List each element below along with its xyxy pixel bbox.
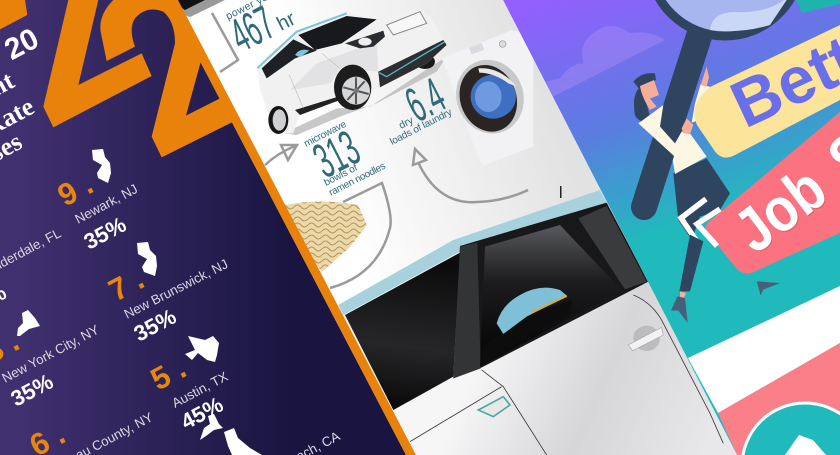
label: 313 bowls of ramen noodles: ramen noodles <box>327 161 388 199</box>
panel: job search infographic <box>500 0 840 455</box>
label: 467 hours: hr <box>273 8 299 35</box>
rank 7: New Brunswick: 7 . <box>103 261 150 308</box>
woman legs and shoes <box>671 235 780 323</box>
arrow: noodles connector <box>330 183 391 288</box>
pillar <box>453 243 481 378</box>
pink section with teal circle <box>718 343 840 455</box>
pink label: Job <box>705 112 840 274</box>
arrow: to microwave <box>265 145 297 165</box>
rank 9: Newark: Newark, NJ <box>72 181 140 227</box>
blouse and arm <box>638 105 688 158</box>
rank 5: Austin <box>145 336 230 434</box>
cloud <box>546 26 664 96</box>
rank 7: New Brunswick: New Brunswick, NJ <box>122 256 230 322</box>
silver car corner at top <box>178 0 225 17</box>
yellow label: Better <box>694 25 840 158</box>
panel: electric car infographic <box>170 0 753 455</box>
car door photo <box>338 190 737 455</box>
label: 313 bowls of ramen noodles <box>304 122 386 196</box>
hair <box>633 73 656 122</box>
pink label: Job: Job <box>723 155 840 267</box>
roof trim <box>338 190 607 315</box>
rear window <box>578 206 647 289</box>
face <box>640 80 659 110</box>
car illustration <box>257 9 447 135</box>
washing machine <box>442 30 534 166</box>
pink label: Job: Job <box>722 154 839 266</box>
side mirror <box>556 300 572 306</box>
small black mark <box>560 186 562 198</box>
magnifying glass <box>644 0 840 207</box>
label: 313 bowls of ramen noodles: bowls of <box>322 162 360 189</box>
arrow: top connector <box>212 13 238 72</box>
ramen noodles <box>285 202 367 272</box>
label: 6.4 loads of laundry: dry <box>397 114 416 132</box>
label: 467 hours <box>226 0 294 49</box>
orange edge stripe <box>168 0 416 455</box>
arrow: to dry <box>413 149 528 202</box>
big number 22 <box>0 0 237 157</box>
window surround <box>453 203 648 378</box>
woman holding magnifier <box>633 73 693 158</box>
label: 6.4 loads of laundry: loads of laundry <box>388 107 454 148</box>
white band <box>688 286 840 413</box>
label: 313 bowls of ramen noodles: microwave <box>302 119 349 150</box>
rank 7: New Brunswick: 35% <box>130 304 180 346</box>
panel: ranking of cities <box>0 0 416 455</box>
EV emblem <box>478 397 510 417</box>
icon: California <box>224 428 262 455</box>
rank 7: New Brunswick <box>103 242 230 346</box>
front window <box>345 253 460 410</box>
rank 5: Austin: 45% <box>177 392 227 434</box>
label: 6.4 loads of laundry: 6.4 <box>397 68 454 133</box>
label: 313 bowls of ramen noodles: 313 <box>305 120 368 189</box>
rank 5: Austin: 5 . <box>145 350 192 397</box>
door handle <box>633 326 660 351</box>
rank 9: Newark: 35% <box>80 212 130 254</box>
label: 6.4 loads of laundry <box>389 78 451 145</box>
rank 8: New York City: 35% <box>7 369 57 411</box>
rank 5: Austin: Austin, TX <box>169 369 230 411</box>
rank 8: New York City <box>0 310 102 411</box>
hand <box>682 118 693 134</box>
heading: 20 <box>0 22 44 67</box>
rank 4: Long Beach <box>200 414 343 455</box>
rank 9: Newark: 9 . <box>52 166 99 213</box>
woman upper-arm behind handle <box>670 67 730 240</box>
door lines <box>410 295 723 455</box>
heading <box>0 22 44 201</box>
rank 9: Newark <box>52 149 140 254</box>
white bracket icon <box>681 199 720 246</box>
rank 8: New York City: New York City, NY <box>0 322 102 386</box>
door window <box>480 225 622 367</box>
icon: New York state <box>200 414 223 440</box>
